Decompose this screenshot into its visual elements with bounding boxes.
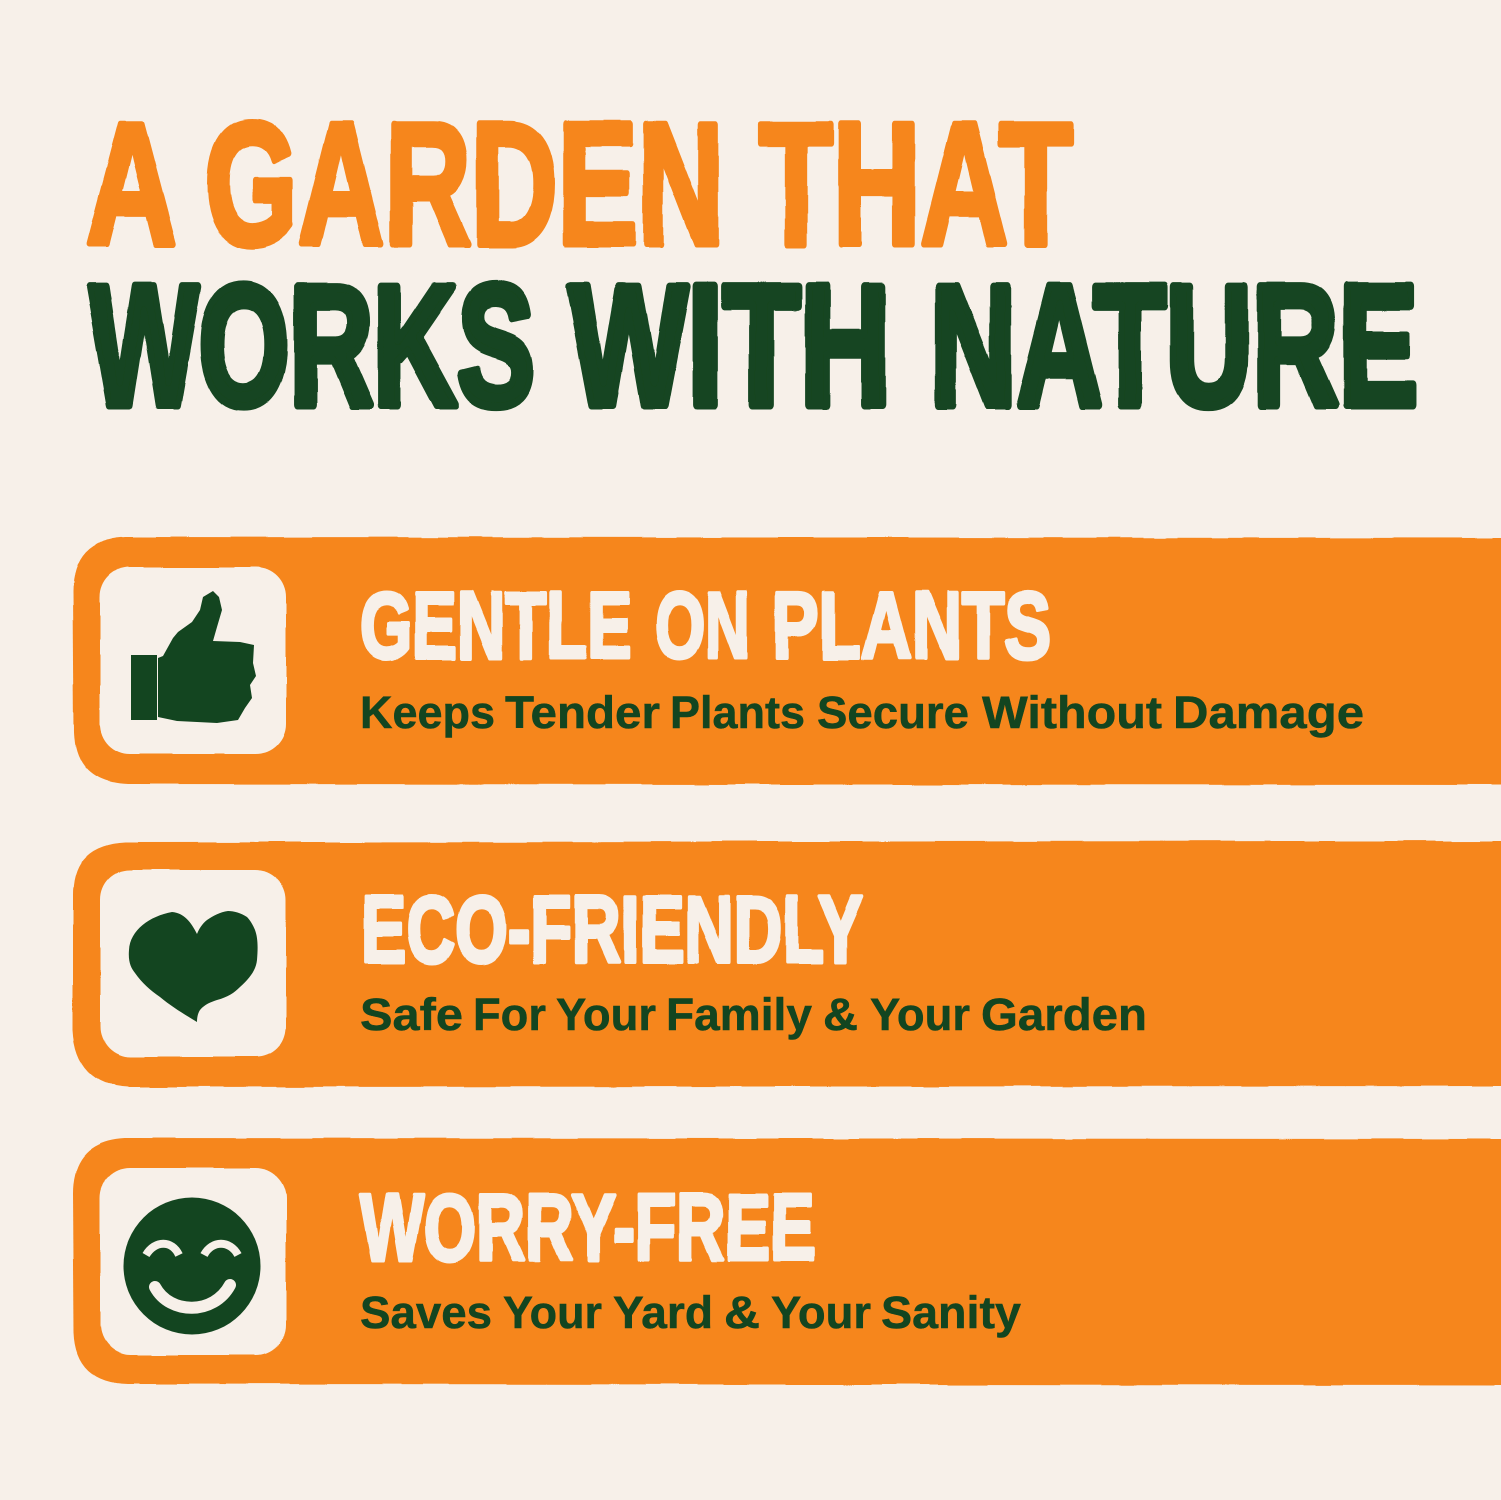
subtext: Without [982, 687, 1162, 738]
panel: eco-friendly [73, 841, 1501, 1087]
heading [360, 573, 1051, 679]
title line: Works With Nature [89, 250, 1418, 442]
heading: ON [655, 573, 750, 679]
subtext: Saves [360, 1287, 492, 1338]
subtext [360, 989, 1147, 1040]
subtext: Yard [613, 1287, 713, 1338]
subtext: Your [870, 989, 970, 1040]
icon: heart [129, 911, 258, 1022]
title [86, 86, 1418, 442]
title line: A Garden That: GARDEN [205, 86, 724, 281]
subtext: Damage [1173, 687, 1364, 738]
icon: smiley [124, 1198, 260, 1334]
title line: Works With Nature: WITH [569, 250, 891, 442]
icon tile [100, 567, 286, 754]
heading: ECO-FRIENDLY [361, 877, 863, 983]
subtext: Your [556, 989, 656, 1040]
title line: A Garden That: A [86, 86, 177, 281]
subtext: Safe [360, 989, 463, 1040]
panel: worry-free [73, 1138, 1501, 1385]
subtext: Your [771, 1287, 871, 1338]
heading: WORRY-FREE [360, 1175, 815, 1281]
subtext: Tender [505, 687, 660, 738]
subtext: Your [503, 1287, 602, 1338]
subtext: Plants [670, 687, 805, 738]
subtext [360, 1287, 1021, 1338]
banner [73, 537, 1501, 785]
subtext: Keeps [360, 687, 495, 738]
icon: thumbs up [131, 591, 256, 723]
banner [73, 1138, 1501, 1385]
panel: gentle on plants [73, 537, 1501, 785]
subtext: Garden [981, 989, 1147, 1040]
subtext: For [473, 989, 546, 1040]
subtext: Family [666, 989, 812, 1040]
subtext: & [823, 989, 858, 1040]
title line: Works With Nature: WORKS [89, 250, 535, 442]
subtext: Sanity [881, 1287, 1021, 1338]
banner [73, 841, 1501, 1087]
icon tile [100, 1168, 286, 1355]
subtext: Secure [817, 687, 969, 738]
subtext [360, 687, 1364, 738]
subtext: & [724, 1287, 760, 1338]
heading: PLANTS [772, 573, 1051, 679]
heading: GENTLE [360, 573, 632, 679]
icon tile [100, 870, 286, 1057]
title line: A Garden That: THAT [759, 86, 1073, 281]
